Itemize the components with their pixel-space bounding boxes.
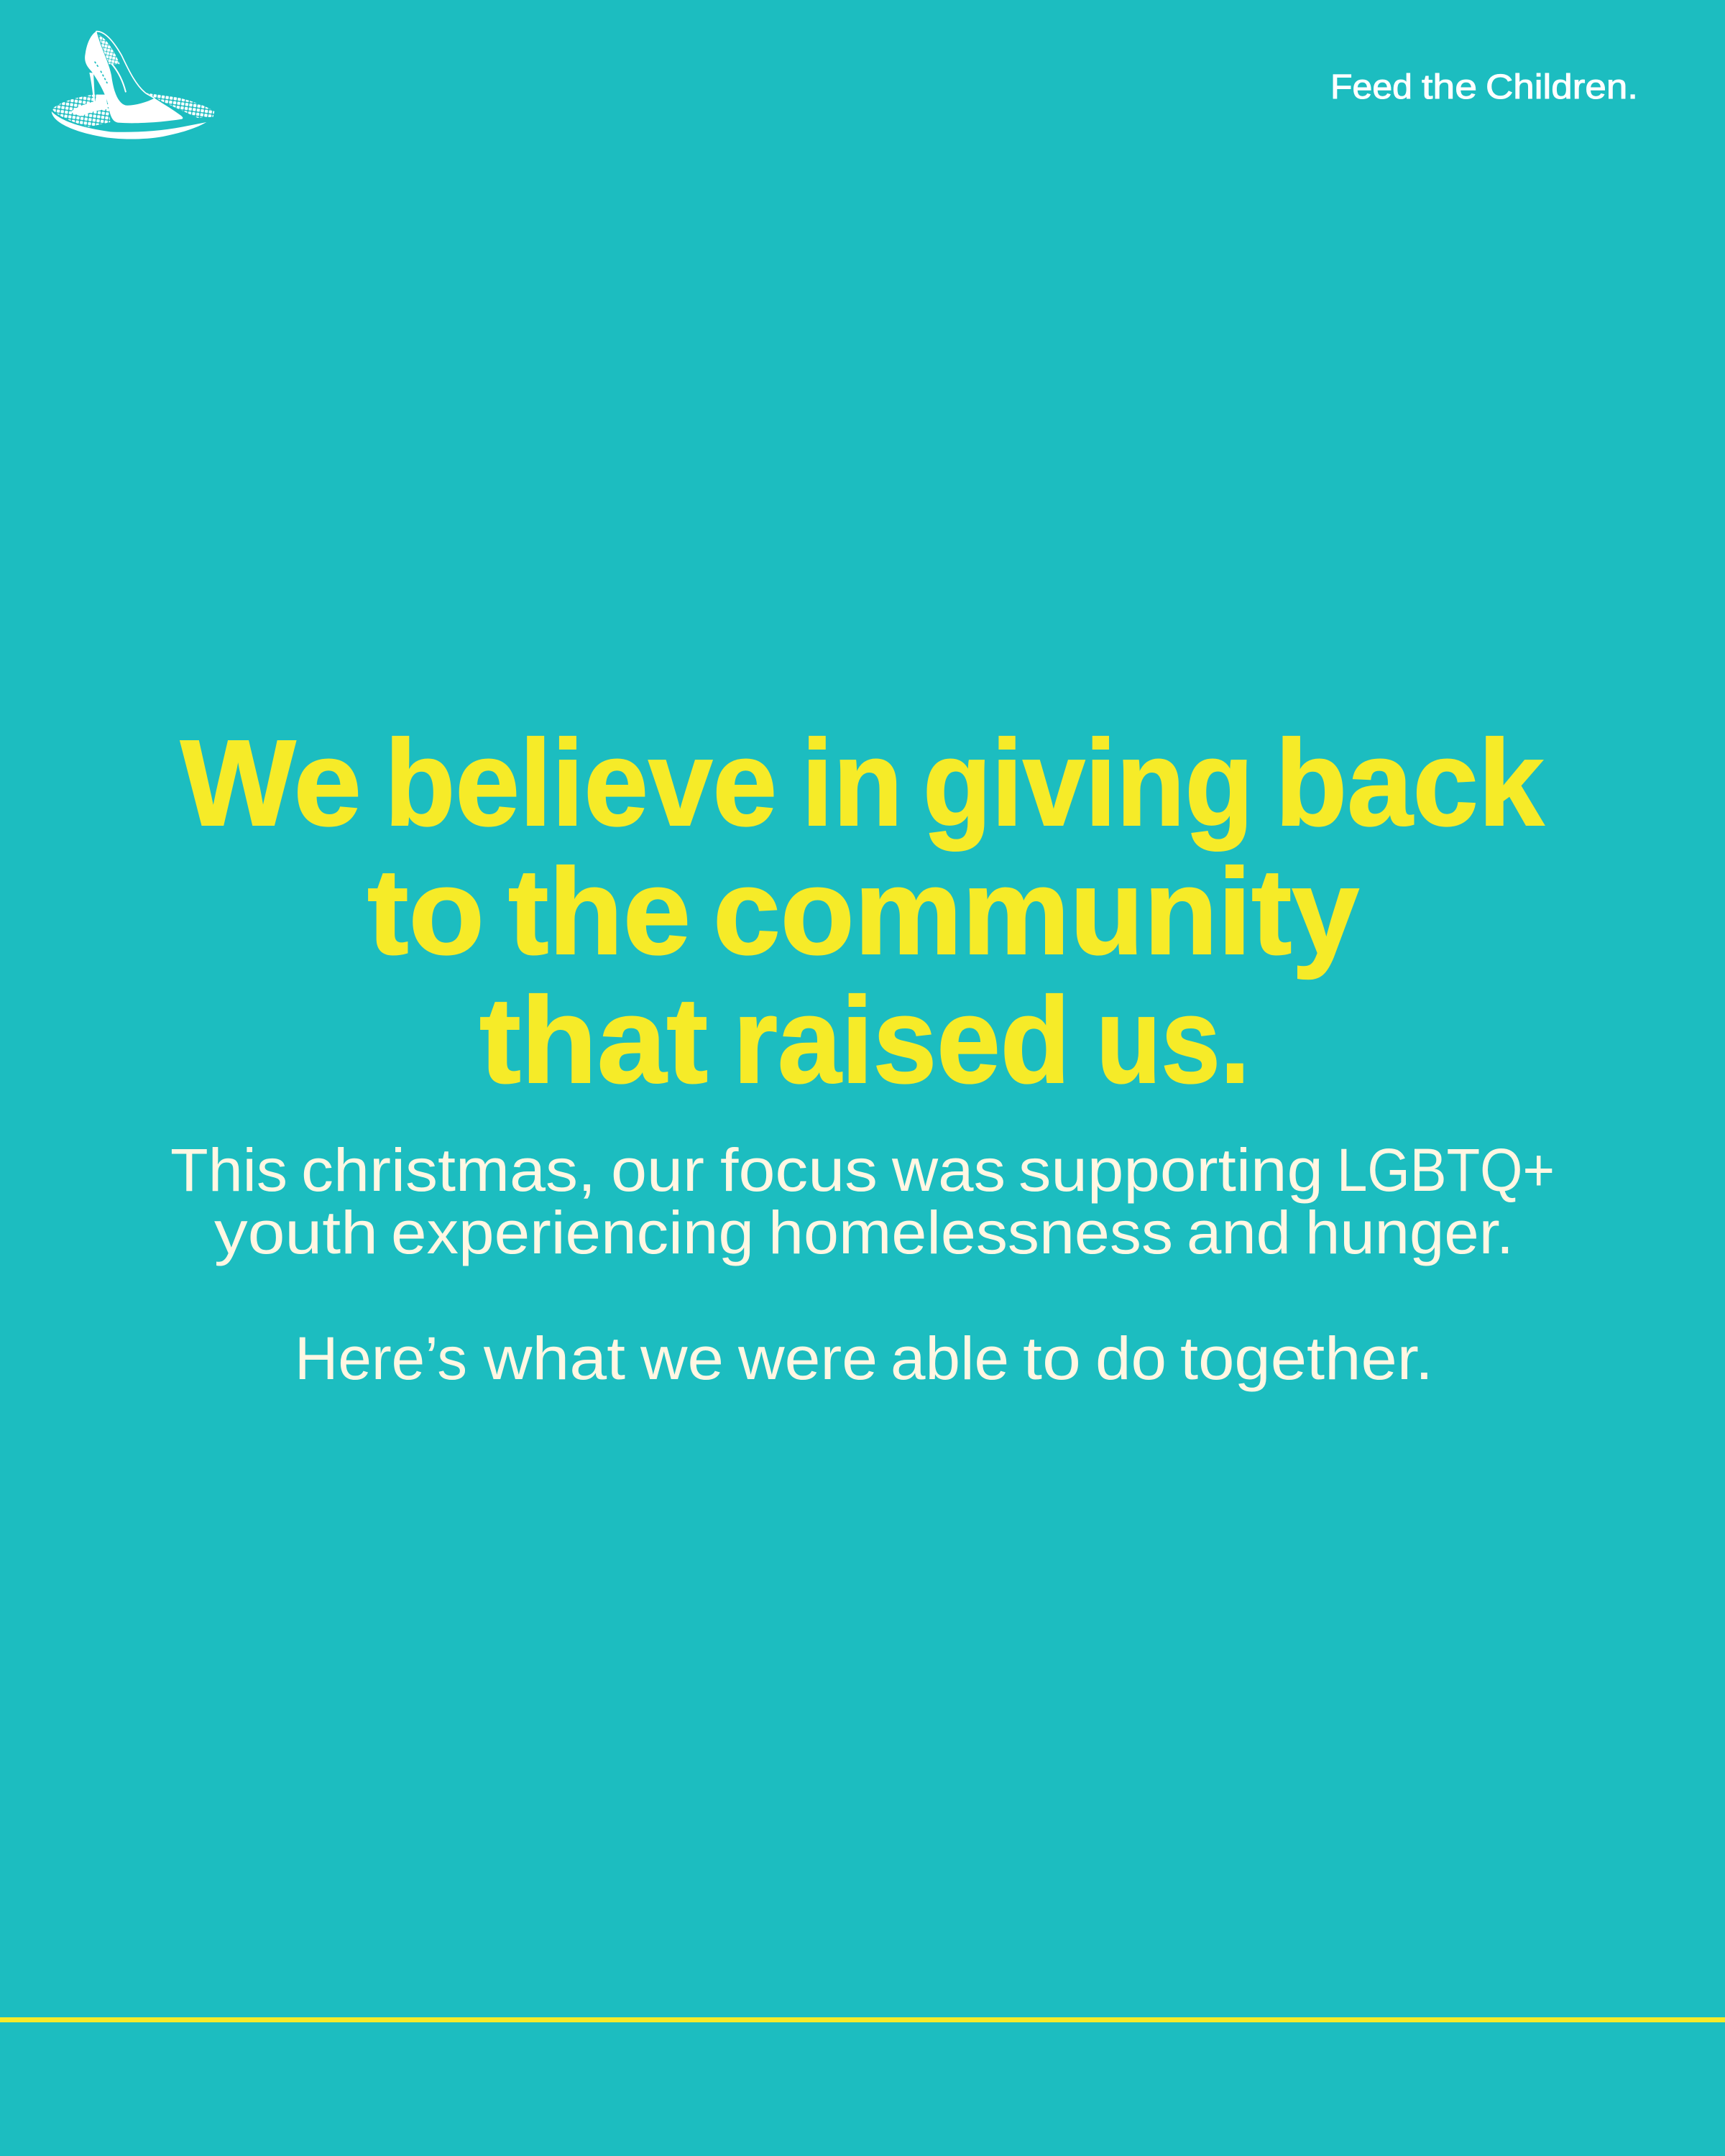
body line 1: was [891, 1136, 1006, 1204]
body line 1: our [611, 1136, 704, 1204]
shoe back outline [96, 32, 155, 98]
body line 2: youth [214, 1199, 378, 1266]
shoe lining halftone [98, 34, 120, 64]
body line 3: to [1023, 1325, 1081, 1392]
shoe seam specks [95, 62, 107, 83]
headline line 2: the [508, 844, 691, 980]
body line 1: This [170, 1136, 288, 1204]
body line 2: hunger. [1305, 1199, 1514, 1266]
brand name: Feed [1330, 68, 1412, 106]
body line 2: experiencing [391, 1199, 754, 1266]
plate halftone right [146, 93, 214, 118]
body line 3: were [737, 1325, 878, 1392]
headline line 3: that [479, 972, 708, 1109]
body copy [170, 1136, 1555, 1392]
headline line 1 [180, 715, 1544, 852]
plate shaded blob [70, 95, 108, 116]
brand name: the [1422, 68, 1477, 106]
plate rim [52, 111, 206, 139]
body line 3: we [640, 1325, 724, 1392]
brand name: Children. [1486, 68, 1638, 106]
body line 3: do [1095, 1325, 1167, 1392]
body line 2: homelessness [768, 1199, 1173, 1266]
brand name [1330, 68, 1638, 106]
headline line 2: to [367, 844, 484, 980]
headline line 1: in [801, 715, 903, 852]
headline line 2 [367, 844, 1359, 980]
body line 3: together. [1180, 1325, 1433, 1392]
headline line 1: giving [923, 715, 1254, 852]
heel [89, 73, 101, 111]
headline line 3 [479, 972, 1250, 1109]
headline line 3: us. [1096, 972, 1250, 1109]
footer rule [0, 2017, 1725, 2022]
headline line 2: community [713, 844, 1359, 980]
body line 1: supporting [1018, 1136, 1323, 1204]
body line 3: Here’s [295, 1325, 467, 1392]
headline line 3: raised [733, 972, 1070, 1109]
logo: high heel on a plate [52, 31, 214, 139]
shoe body [85, 31, 183, 123]
body line 2: and [1187, 1199, 1291, 1266]
body line 2 [214, 1199, 1514, 1266]
shoe inner line [111, 63, 126, 92]
body line 1 [170, 1136, 1555, 1204]
headline line 1: back [1275, 715, 1544, 852]
body line 3: what [483, 1325, 625, 1392]
body line 1: LGBTQ+ [1337, 1136, 1555, 1204]
plate halftone left [52, 95, 110, 127]
headline line 1: believe [385, 715, 777, 852]
body line 3 [295, 1325, 1433, 1392]
body line 1: christmas, [301, 1136, 596, 1204]
body line 3: able [891, 1325, 1009, 1392]
headline line 1: We [180, 715, 362, 852]
body line 1: focus [720, 1136, 878, 1204]
headline [180, 715, 1544, 1109]
